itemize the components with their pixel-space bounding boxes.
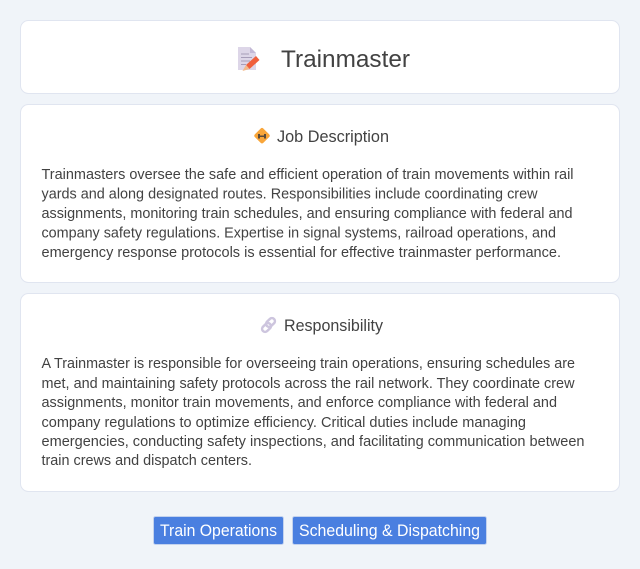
tag: train operations: Train Operations (160, 522, 277, 540)
heading: responsibility: Responsibility (284, 317, 384, 335)
text block: job description: emergency response protocols is essential for effective trainmaster performance. (42, 245, 561, 261)
text block: responsibility: emergencies, conducting safety inspections, and facilitating communication between (42, 434, 585, 450)
text block: responsibility: A Trainmaster is responsible for overseeing train operations, ensuring schedules are (42, 356, 575, 372)
icon: construction sign (254, 127, 270, 144)
text block: job description: yards and along designated routes. Responsibilities include coordinating crew (42, 186, 538, 202)
text block: job description: company safety regulations. Expertise in signal systems, railroad operations, and (42, 226, 556, 242)
text block: responsibility: train crews and dispatch centers. (42, 453, 252, 469)
tag: train operations (154, 516, 284, 544)
tag: scheduling and dispatching (292, 516, 486, 544)
text block: job description: assignments, monitoring train schedules, and ensuring compliance with federal and (42, 206, 573, 222)
icon: memo with pencil (238, 47, 260, 71)
text block: responsibility: assignments, monitor train movements, and enforce compliance with federal and (42, 395, 557, 411)
panel: job description (20, 104, 620, 282)
tag: scheduling and dispatching: Scheduling & Dispatching (299, 522, 480, 540)
text block: job description (42, 167, 574, 261)
title: Trainmaster (281, 46, 410, 73)
icon: link (261, 317, 276, 333)
text block: responsibility: company regulations to optimize efficiency. Critical duties include managing (42, 415, 526, 431)
text block: job description: Trainmasters oversee the safe and efficient operation of train movements within rail (42, 167, 574, 183)
panel: responsibility (20, 294, 620, 492)
text block: responsibility (42, 356, 585, 469)
text block: responsibility: met, and maintaining safety protocols across the rail network. They coordinate crew (42, 376, 575, 392)
panel: title card (20, 20, 620, 94)
heading: job description: Job Description (277, 128, 389, 146)
